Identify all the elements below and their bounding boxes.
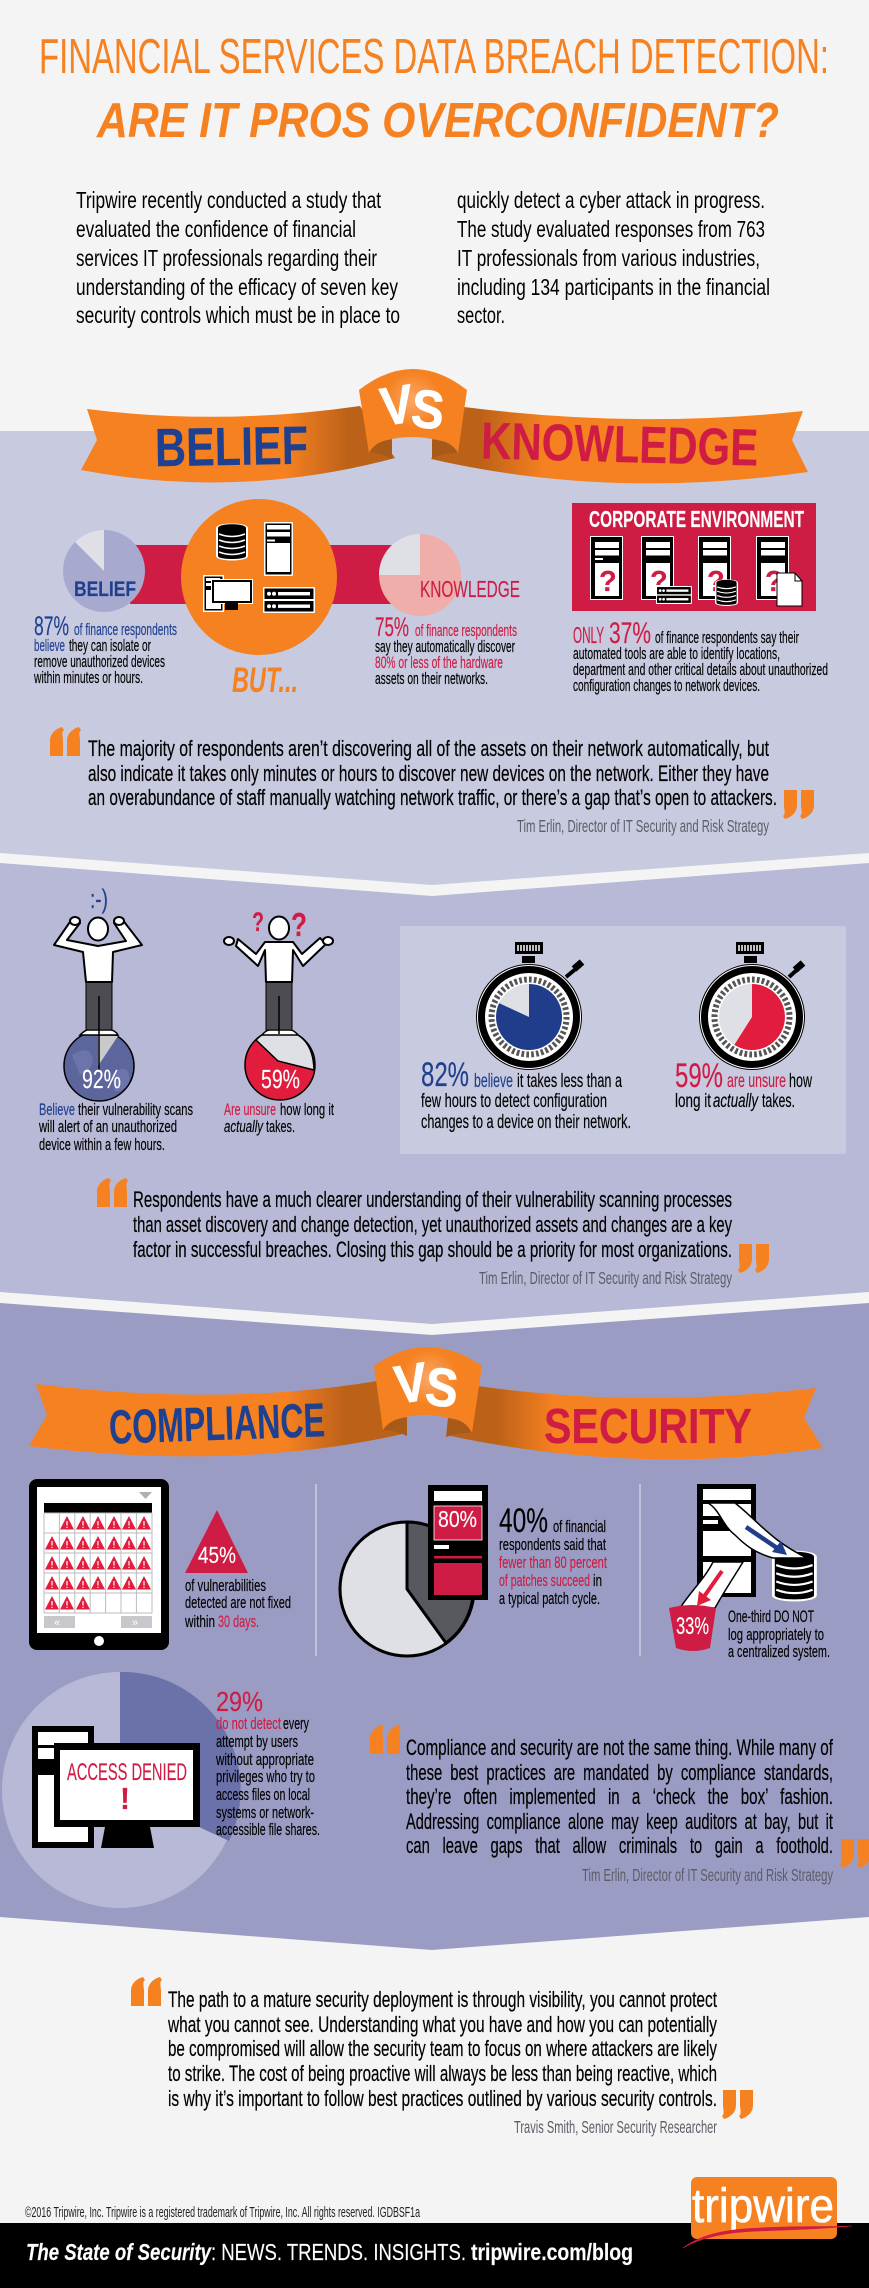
banner: belief vs knowledge: VS [377,372,446,441]
panel: corporate environment: ? [765,566,783,598]
text block: 82% believe: few hours to detect configuration [421,1090,607,1112]
icon: tablet with warning triangles [29,1479,169,1650]
panel: section one background [0,431,869,885]
text block: 87% believe [33,611,177,687]
icon: tablet with warning triangles: » [132,1617,138,1629]
text block: 92% believe: Believe [39,1101,75,1119]
text block: 59% unsure: Are unsure [224,1101,276,1119]
text block: 29% do not detect: do not detect [216,1715,281,1733]
text block: 87% believe: within minutes or hours. [33,669,143,687]
text block: 29% do not detect: privileges who try to [216,1768,315,1786]
banner: belief vs knowledge: KNOWLEDGE [480,412,759,478]
text block: one-third do not log: One-third DO NOT [728,1608,814,1626]
text block: 29% do not detect: without appropriate [215,1751,314,1769]
text block: 82% believe: 82% [421,1056,469,1094]
figure: confident person on 92% globe: :-) [90,884,108,914]
text block: 92% believe: will alert of an unauthorized [38,1118,177,1136]
title: ARE IT PROS OVERCONFIDENT? [96,94,779,148]
text block: 45% vulnerabilities: of vulnerabilities [185,1577,266,1595]
chart: 40% patch pie with server [340,1485,488,1656]
text block: 45% vulnerabilities: within [184,1613,215,1631]
text block: 29% do not detect: attempt by users [216,1733,298,1751]
text block: 59% unsure: how long it [280,1101,334,1119]
banner: belief vs knowledge: BELIEF [154,416,308,478]
text block: one-third do not log [728,1608,830,1661]
panel: section two background [0,863,869,1324]
icon: stopwatch 82% [476,942,582,1070]
figure: unsure person on 59% ball: 59% [261,1064,300,1094]
text block: 59% unsure stopwatch: are unsure [727,1070,786,1092]
text block: introduction: security controls which must be in place to [76,302,400,328]
text block: 75% discover: of finance respondents [415,622,517,640]
chart: knowledge pie 75% [379,534,520,616]
panel: corporate environment: ? [650,566,668,598]
text block: 40% of financial respondents: respondents said that [499,1536,606,1554]
quote: Tim Erlin on vulnerability scanning [97,1178,769,1288]
footer text: : NEWS. TRENDS. INSIGHTS. [211,2239,466,2265]
footer text [26,2239,633,2265]
text block: introduction [76,187,770,328]
quote: Travis Smith on visibility: Travis Smith, Senior Security Researcher [514,2117,717,2137]
icon: server logging to database and bucket [669,1484,817,1651]
footer bar [0,2223,869,2288]
text block: introduction: evaluated the confidence of financial [76,216,356,242]
panel: corporate environment: ? [707,566,725,598]
figure: unsure person on 59% ball [224,906,333,1100]
text block: 75% discover [375,612,517,688]
text block: 87% believe: 87% [34,611,69,641]
text block: only 37%: 37% [609,617,651,650]
text block: 92% believe: device within a few hours. [39,1136,165,1154]
text block: only 37%: ONLY [573,622,604,648]
connector band [130,545,394,604]
text block: introduction: services IT professionals regarding their [76,245,377,271]
text block: 59% unsure stopwatch: how [789,1070,813,1092]
text block: 45% vulnerabilities [184,1577,291,1631]
icon group: devices on orange circle [181,499,337,655]
figure: confident person on 92% globe [54,884,142,1101]
banner: compliance vs security: COMPLIANCE [108,1394,326,1455]
text block: 87% believe: remove unauthorized devices [34,653,165,671]
text block: 59% unsure stopwatch [675,1057,813,1112]
text block: 82% believe: it takes less than a [517,1070,622,1092]
stat: 45% triangle [185,1510,248,1573]
chart: belief pie 87%: BELIEF [74,578,136,601]
text block: introduction: including 134 participants in the financial [457,274,770,300]
figure: unsure person on 59% ball: ? [252,907,264,937]
chart: 29% pie with access denied monitor: ! [120,1781,130,1816]
text block: 75% discover: 75% [375,612,409,642]
footer text: tripwire.com/blog [471,2239,633,2265]
text block: introduction: quickly detect a cyber attack in progress. [457,187,765,213]
text block: 29% do not detect: access files on local [216,1786,310,1804]
text block: 40% of financial respondents: a typical patch cycle. [499,1590,600,1608]
chart: knowledge pie 75%: KNOWLEDGE [420,576,520,602]
text block: introduction: Tripwire recently conducted a study that [76,187,381,213]
text block: 29% do not detect [215,1686,320,1839]
icon: stopwatch 59% [700,942,804,1070]
text block: 59% unsure stopwatch: 59% [675,1057,723,1095]
title [39,30,829,148]
text block: 82% believe [421,1056,631,1133]
text block: introduction: The study evaluated responses from 763 [457,216,765,242]
copyright: ©2016 Tripwire, Inc. Tripwire is a registered trademark of Tripwire, Inc. All rights reserved. IGDBSF1a [25,2205,421,2221]
text block: introduction: IT professionals from various industries, [457,245,760,271]
banner: compliance vs security: VS [391,1350,460,1419]
text block: 29% do not detect: systems or network- [216,1804,314,1822]
text block: 59% unsure stopwatch: takes. [762,1090,795,1112]
text block: 40% of financial respondents: 40% [499,1502,548,1540]
logo: tripwire: tripwire [692,2180,834,2233]
text block: 40% of financial respondents [499,1502,607,1608]
text block: 82% believe: changes to a device on their network. [421,1111,631,1133]
text block: 87% believe: believe [34,637,65,655]
text block: 59% unsure stopwatch: long it [675,1090,711,1112]
text block: 59% unsure: takes. [266,1118,295,1136]
banner: compliance vs security [29,1347,823,1459]
text block: 59% unsure: actually [224,1118,264,1136]
text block: 75% discover: assets on their networks. [375,670,488,688]
text block: 59% unsure [224,1101,334,1136]
text block: 29% do not detect: every [283,1715,309,1733]
text block: 59% unsure stopwatch: actually [713,1090,759,1112]
text block: 92% believe [38,1101,193,1154]
text block: 75% discover: say they automatically discover [375,638,515,656]
icon: tablet with warning triangles: « [54,1617,60,1629]
text block: one-third do not log: log appropriately to [728,1626,824,1644]
stat: 45% triangle: 45% [198,1542,236,1568]
text block: introduction: understanding of the efficacy of seven key [76,274,398,300]
text block: 92% believe: their vulnerability scans [78,1101,193,1119]
text block: only 37% [573,617,828,695]
text block: 29% do not detect: accessible file shares. [216,1821,320,1839]
figure: unsure person on 59% ball: ? [291,906,307,943]
banner: compliance vs security: SECURITY [544,1400,752,1454]
text block: 87% believe: of finance respondents [74,621,177,639]
text block: 40% of financial respondents: of financial [553,1518,606,1536]
text block: 75% discover: 80% or less of the hardware [375,654,503,672]
text block: 40% of financial respondents: in [593,1572,602,1590]
but text: BUT... [232,661,298,700]
text block: introduction: sector. [457,302,505,328]
figure: confident person on 92% globe: 92% [82,1064,121,1094]
text block: 40% of financial respondents: fewer than 80 percent [499,1554,607,1572]
chart: 40% patch pie with server: 80% [438,1506,477,1532]
text block: 45% vulnerabilities: detected are not fixed [185,1594,291,1612]
text block: 45% vulnerabilities: 30 days. [218,1613,259,1631]
footer text: The State of Security [26,2239,212,2265]
quote: Tim Erlin on vulnerability scanning: Tim Erlin, Director of IT Security and Risk Strategy [479,1268,732,1288]
panel: section three background [0,1303,869,1950]
panel: corporate environment: ? [599,566,617,598]
chart: 29% pie with access denied monitor [2,1672,241,1908]
panel: stopwatches [400,926,846,1154]
text block: 82% believe: believe [474,1070,513,1092]
panel: corporate environment [572,503,816,611]
chart: 29% pie with access denied monitor: ACCESS DENIED [67,1759,187,1786]
chart: belief pie 87% [63,530,145,612]
text block: 87% believe: they can isolate or [69,637,151,655]
quote: Tim Erlin on compliance [370,1725,869,1885]
quote: Travis Smith on visibility [131,1977,753,2137]
text block: 40% of financial respondents: of patches succeed [499,1572,590,1590]
logo: tripwire [683,2177,852,2248]
quote: Tim Erlin on asset discovery [50,727,814,836]
banner: belief vs knowledge [81,369,808,483]
icon: server logging to database and bucket: 33% [676,1613,709,1640]
text block: 29% do not detect: 29% [216,1686,263,1717]
